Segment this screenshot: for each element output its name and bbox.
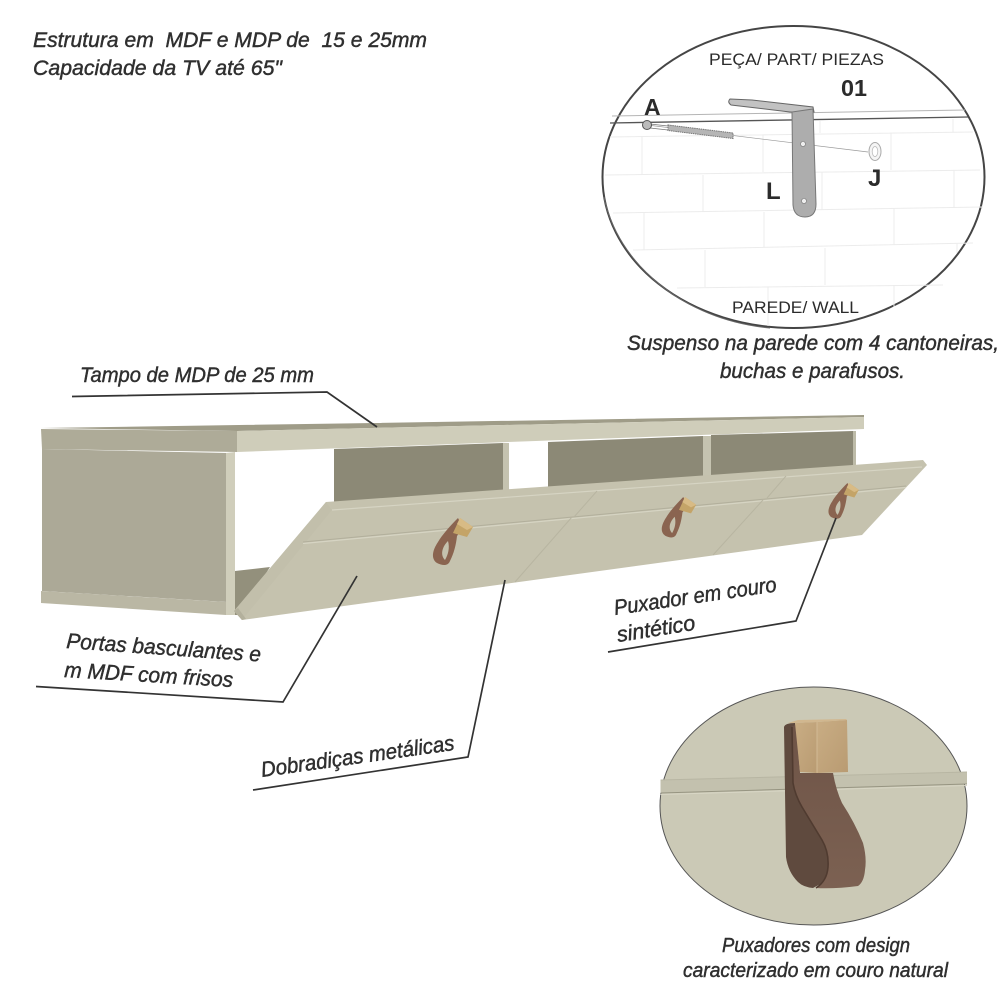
door groove	[660, 772, 967, 794]
caption: handle close-up: caracterizado em couro natural	[683, 960, 949, 982]
flap doors	[234, 460, 927, 620]
label: parede: PAREDE/ WALL	[732, 299, 859, 317]
label: peça: PEÇA/ PART/ PIEZAS	[709, 51, 884, 69]
leather strap	[784, 723, 866, 888]
caption: handle close-up	[683, 935, 949, 982]
furniture: floating TV unit with flap doors	[41, 415, 927, 620]
callout: hinges	[253, 580, 505, 790]
label: quantity 01: 01	[841, 75, 867, 101]
panel: wall mounting diagram	[602, 26, 984, 328]
panel: handle close-up	[660, 687, 967, 925]
callout: leather handle: sintético	[615, 611, 697, 647]
side panel	[42, 449, 227, 602]
heading: structure and TV capacity	[33, 28, 427, 80]
caption: handle close-up: Puxadores com design	[722, 935, 910, 957]
icon: handle 2	[662, 497, 696, 537]
caption: wall mounting: buchas e parafusos.	[720, 359, 905, 383]
back panels	[334, 431, 853, 510]
label: J: J	[868, 165, 881, 192]
caption: wall mounting	[627, 331, 999, 383]
callout: leather handle	[608, 518, 836, 652]
label: A: A	[644, 94, 661, 120]
callout: top board	[72, 363, 377, 427]
icon: screw and washer	[642, 120, 881, 160]
heading: structure and TV capacity: Capacidade da TV até 65"	[33, 56, 283, 80]
callout: leather handle: Puxador em couro	[612, 573, 778, 620]
label: L: L	[766, 178, 781, 205]
callout: flap doors: Portas basculantes e	[66, 629, 262, 667]
callout: top board: Tampo de MDP de 25 mm	[80, 363, 314, 387]
uprights	[503, 431, 856, 490]
heading: structure and TV capacity: Estrutura em MDF e MDP de 15 e 25mm	[33, 28, 427, 52]
icon: L bracket	[729, 99, 816, 217]
bottom shelf	[235, 567, 270, 615]
callout: flap doors: m MDF com frisos	[64, 658, 234, 692]
icon: handle 3	[828, 483, 859, 519]
callout: hinges: Dobradiças metálicas	[259, 731, 456, 782]
top board	[41, 415, 864, 452]
icon: handle 1	[433, 518, 473, 565]
callout: flap doors	[36, 576, 357, 702]
brass knob	[788, 719, 848, 773]
